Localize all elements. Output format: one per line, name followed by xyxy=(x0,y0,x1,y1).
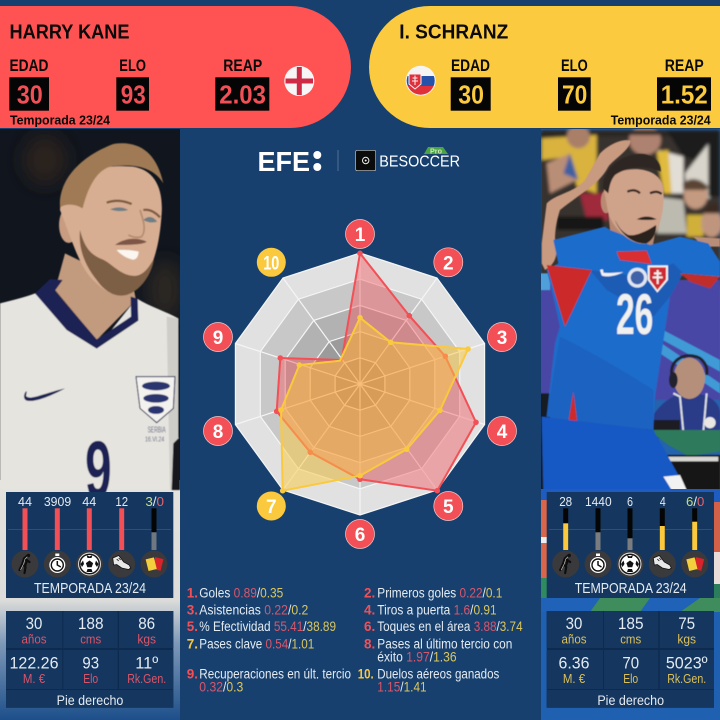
panel: Kane profile: Elo xyxy=(83,671,98,686)
panel: Schranz profile: Rk.Gen. xyxy=(667,671,706,686)
panel: Schranz profile: Pie derecho xyxy=(597,692,664,708)
icon: Slovakia flag xyxy=(405,66,437,96)
logo: EFE: EFE xyxy=(258,146,310,177)
logo: BeSoccer Pro xyxy=(356,146,460,171)
panel: Kane profile: 122.26 xyxy=(10,653,58,672)
legend: Pases al último tercio con xyxy=(377,636,512,651)
legend: 7. xyxy=(187,636,198,651)
panel: Schranz season stats: 1440 xyxy=(585,494,612,509)
panel: Schranz profile: Elo xyxy=(623,671,638,686)
axis number badges: 5 xyxy=(443,497,454,518)
stat: Elo xyxy=(558,56,591,111)
photo: Harry Kane xyxy=(0,129,183,720)
icons: Kane stats xyxy=(12,550,168,578)
panel: Kane season stats: 44 xyxy=(82,494,96,509)
legend: Asistencias 0.22/0.2 xyxy=(199,602,308,617)
panel: Kane profile: cms xyxy=(80,631,102,646)
bar chart: Kane xyxy=(22,508,156,550)
panel: Schranz profile: 75 xyxy=(678,614,695,633)
legend: Tiros a puerta 1.6/0.91 xyxy=(377,602,497,617)
legend: 10. xyxy=(358,666,374,681)
axis number badges: 1 xyxy=(355,225,366,246)
panel: Kane season stats: 3/0 xyxy=(145,494,164,509)
panel: Schranz season stats: 6/0 xyxy=(686,494,704,509)
panel: Kane profile: 93 xyxy=(82,653,99,672)
stat: Edad: 30 xyxy=(458,79,484,109)
panel: Schranz profile: cms xyxy=(620,631,642,646)
axis number badges: 8 xyxy=(213,422,223,443)
photo: Harry Kane: 16.VI.24 xyxy=(145,435,164,444)
axis number badges: 6 xyxy=(355,525,365,546)
panel: Kane profile: M. € xyxy=(23,671,46,686)
radar grid xyxy=(235,253,485,515)
panel: Kane season stats: TEMPORADA 23/24 xyxy=(34,581,146,597)
radar chart xyxy=(204,220,516,548)
legend: 0.32/0.3 xyxy=(199,680,243,695)
legend xyxy=(187,586,523,695)
legend: Recuperaciones en últ. tercio xyxy=(199,666,351,681)
bar chart: Schranz xyxy=(563,508,697,550)
panel: Schranz profile xyxy=(547,611,714,708)
panel: Schranz profile: 70 xyxy=(622,653,639,672)
axis number badges: 4 xyxy=(497,422,508,443)
legend: 1.15/1.41 xyxy=(377,680,427,695)
name: Harry Kane: HARRY KANE xyxy=(10,22,130,44)
stat: Elo: ELO xyxy=(119,56,146,75)
stat: Edad: EDAD xyxy=(451,56,490,75)
panel: Kane profile: Pie derecho xyxy=(57,692,124,708)
legend: éxito 1.97/1.36 xyxy=(377,650,457,665)
legend: Toques en el área 3.88/3.74 xyxy=(377,619,523,634)
panel: Kane profile: kgs xyxy=(137,631,157,646)
panel: Schranz profile: M. € xyxy=(563,671,586,686)
panel: Schranz profile: 5023º xyxy=(666,653,708,672)
header: Harry Kane xyxy=(0,6,351,128)
icons: Schranz stats xyxy=(552,550,708,578)
stat: Elo: 70 xyxy=(562,79,587,109)
panel: Schranz season stats xyxy=(547,492,714,598)
panel: Schranz profile: años xyxy=(562,631,587,646)
logo: BeSoccer Pro: BESOCCER xyxy=(379,154,460,171)
panel: Kane profile: 30 xyxy=(26,614,42,633)
legend: % Efectividad 55.41/38.89 xyxy=(199,619,336,634)
photo: Harry Kane: 9 xyxy=(85,425,112,514)
panel: Kane season stats: 44 xyxy=(18,494,32,509)
season note: Temporada 23/24 xyxy=(10,112,111,128)
panel: Kane profile: 11º xyxy=(135,653,158,672)
stat: Edad xyxy=(9,56,49,111)
panel: Kane profile: Rk.Gen. xyxy=(127,671,166,686)
legend: 2. xyxy=(364,586,375,601)
legend: 3. xyxy=(187,602,198,617)
axis number badges: 9 xyxy=(213,328,223,349)
panel: Kane profile xyxy=(6,611,173,708)
series: Harry Kane xyxy=(274,250,479,494)
stat: Edad: EDAD xyxy=(10,56,48,75)
header: I. Schranz xyxy=(369,6,720,128)
series: I. Schranz xyxy=(278,315,471,494)
axis number badges xyxy=(204,220,516,548)
legend: Primeros goles 0.22/0.1 xyxy=(377,586,502,601)
stat: Elo: 93 xyxy=(121,79,146,109)
stat: Elo: ELO xyxy=(561,56,588,75)
legend: 1. xyxy=(187,586,198,601)
panel: Schranz profile: 6.36 xyxy=(558,653,590,672)
legend: Pases clave 0.54/1.01 xyxy=(199,636,314,651)
logo: BeSoccer Pro: Pro xyxy=(430,146,442,156)
panel: Kane profile: 188 xyxy=(78,614,104,633)
legend: Duelos aéreos ganados xyxy=(377,666,500,681)
panel: Schranz season stats: TEMPORADA 23/24 xyxy=(575,581,687,597)
stat: Reap: 2.03 xyxy=(219,79,266,109)
name: Schranz: I. SCHRANZ xyxy=(399,22,508,44)
axis number badges: 7 xyxy=(266,497,277,518)
panel: Kane profile: 86 xyxy=(138,614,155,633)
stat: Reap: REAP xyxy=(223,56,262,75)
stat: Elo xyxy=(116,56,149,111)
axis number badges: 3 xyxy=(497,328,507,349)
axis number badges: 2 xyxy=(443,253,454,274)
panel: Kane season stats: 3909 xyxy=(44,494,71,509)
panel: Schranz season stats: 6 xyxy=(627,494,633,509)
legend: Goles 0.89/0.35 xyxy=(199,586,283,601)
legend: 8. xyxy=(364,636,375,651)
panel: Kane profile: años xyxy=(22,631,47,646)
panel: Kane season stats: 12 xyxy=(115,494,128,509)
legend: 4. xyxy=(364,602,375,617)
stat: Reap xyxy=(657,56,711,111)
photo: I. Schranz xyxy=(540,125,720,720)
photo: I. Schranz: 26 xyxy=(616,283,653,347)
panel: Schranz season stats: 28 xyxy=(559,494,572,509)
legend: 5. xyxy=(187,619,198,634)
stat: Reap: 1.52 xyxy=(661,79,708,109)
stat: Reap: REAP xyxy=(665,56,704,75)
panel: Kane season stats xyxy=(6,492,173,598)
stat: Reap xyxy=(215,56,269,111)
legend: 6. xyxy=(364,619,375,634)
stat: Edad xyxy=(451,56,491,111)
axis number badges: 10 xyxy=(263,253,279,274)
icon: England flag xyxy=(284,66,314,96)
panel: Schranz profile: 185 xyxy=(618,614,644,633)
photo: Harry Kane: SERBIA xyxy=(148,425,166,434)
legend: 9. xyxy=(187,666,198,681)
panel: Schranz profile: kgs xyxy=(677,631,697,646)
panel: Schranz season stats: 4 xyxy=(660,494,666,509)
stat: Edad: 30 xyxy=(17,79,43,109)
panel: Schranz profile: 30 xyxy=(566,614,582,633)
season note: Temporada 23/24 xyxy=(611,112,711,128)
